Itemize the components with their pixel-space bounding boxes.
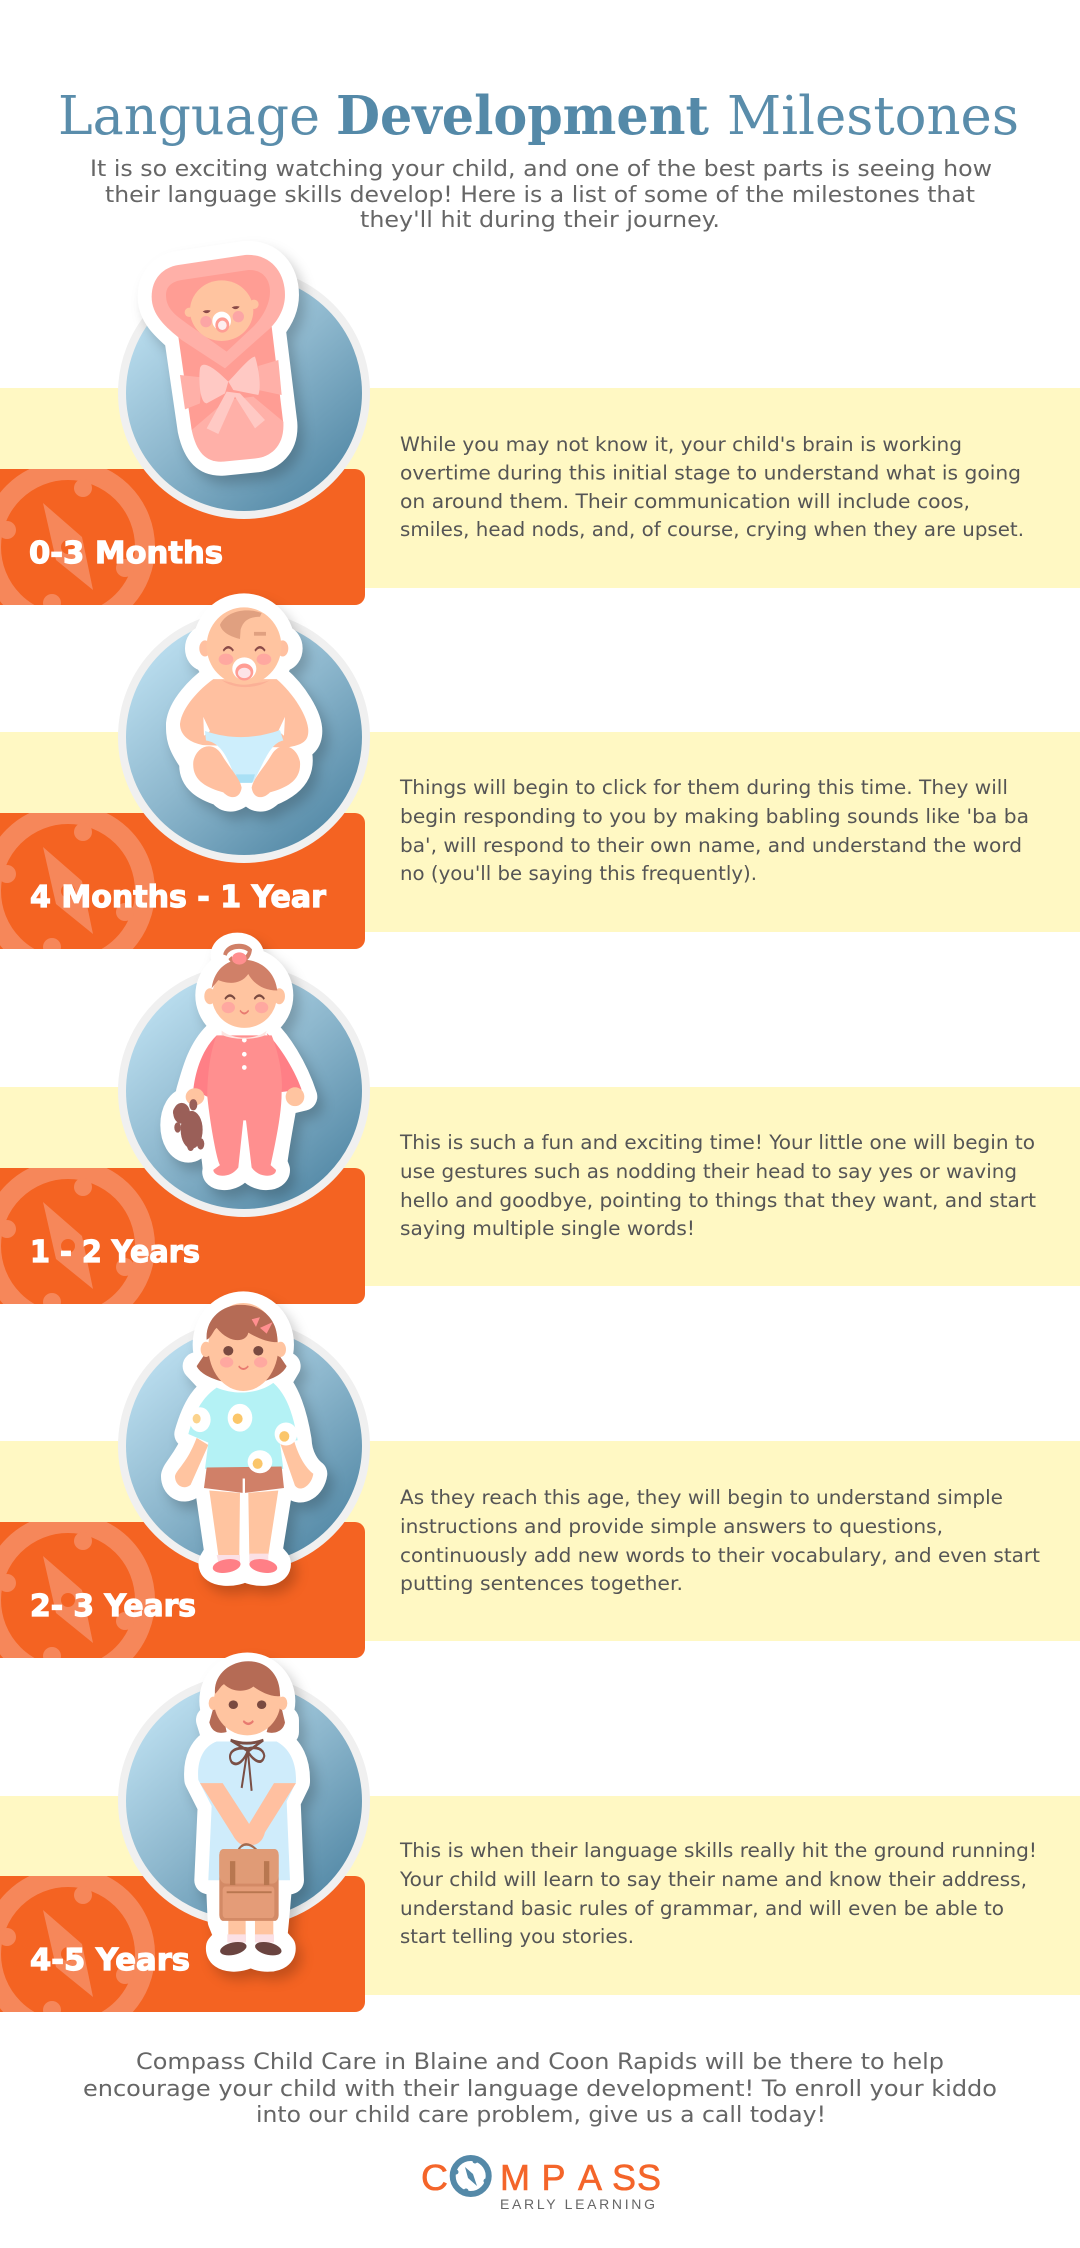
label: 2- 3 Years [30, 1589, 196, 1624]
circle [122, 1324, 366, 1568]
circle [122, 1679, 366, 1923]
panel: 1 - 2 years [0, 946, 1080, 1323]
label: 0-3 Months [29, 536, 223, 571]
logo: C [421, 2157, 448, 2198]
label: 4-5 Years [30, 1943, 190, 1978]
description: on around them. Their communication will include coos, [400, 490, 970, 513]
intro text: It is so exciting watching your child, and one of the best parts is seeing how [90, 157, 992, 182]
description: continuously add new words to their vocabulary, and even start [400, 1544, 1040, 1567]
description [399, 1131, 1036, 1240]
label: 4 Months - 1 Year [30, 880, 326, 915]
description: saying multiple single words! [400, 1217, 695, 1240]
icon: child with backpack [198, 1661, 296, 1958]
description: begin responding to you by making babling sounds like 'ba ba [400, 805, 1029, 828]
label: 1 - 2 Years [30, 1235, 200, 1270]
title: Language [58, 86, 320, 147]
description: While you may not know it, your child's brain is working [400, 433, 962, 456]
description: smiles, head nods, and, of course, crying when they are upset. [400, 518, 1024, 541]
description: use gestures such as nodding their head to say yes or waving [400, 1160, 1017, 1183]
icon: compass logo [453, 2158, 489, 2194]
description: putting sentences together. [400, 1572, 683, 1595]
orange label tab [0, 1876, 365, 2012]
panel: 0-3 months [0, 255, 1080, 624]
logo: MPASS [500, 2157, 661, 2198]
yellow band [0, 732, 1080, 932]
orange label tab [0, 469, 365, 605]
description: understand basic rules of grammar, and will even be able to [400, 1897, 1004, 1920]
intro text [90, 157, 992, 233]
icon: swaddled baby [152, 255, 285, 462]
orange label tab [0, 813, 365, 949]
icon: sitting baby [180, 607, 308, 798]
closing text [83, 2050, 997, 2128]
intro text: they'll hit during their journey. [360, 208, 720, 233]
orange label tab [0, 1522, 365, 1658]
title: Development [336, 85, 709, 147]
description [399, 776, 1029, 885]
description: Your child will learn to say their name and know their address, [399, 1868, 1027, 1891]
icon: child in egg shirt [175, 1303, 313, 1575]
yellow band [0, 1087, 1080, 1286]
yellow band [0, 388, 1080, 588]
description [400, 1486, 1040, 1595]
description: hello and goodbye, pointing to things that they want, and start [400, 1189, 1036, 1212]
description: As they reach this age, they will begin to understand simple [400, 1486, 1003, 1509]
panel: 4-5 years [0, 1661, 1080, 2031]
description: ba', will respond to their own name, and understand the word [400, 834, 1022, 857]
closing text: into our child care problem, give us a call today! [256, 2103, 826, 2128]
title [58, 85, 1019, 147]
description [399, 1839, 1037, 1948]
circle [122, 271, 366, 515]
panel: 4 months - 1 year [0, 607, 1080, 968]
closing text: Compass Child Care in Blaine and Coon Rapids will be there to help [136, 2050, 944, 2075]
description: start telling you stories. [400, 1925, 634, 1948]
circle [122, 615, 366, 859]
orange label tab [0, 1168, 365, 1304]
yellow band [0, 1441, 1080, 1641]
logo: EARLY LEARNING [500, 2196, 657, 2212]
description: This is such a fun and exciting time! Your little one will begin to [399, 1131, 1035, 1154]
icon: toddler with teddy bear [173, 946, 304, 1176]
circle [122, 969, 366, 1213]
yellow band [0, 1796, 1080, 1995]
closing text: encourage your child with their language development! To enroll your kiddo [83, 2077, 997, 2102]
description: Things will begin to click for them during this time. They will [399, 776, 1008, 799]
description: This is when their language skills really hit the ground running! [399, 1839, 1037, 1862]
description: instructions and provide simple answers to questions, [400, 1515, 943, 1538]
intro text: their language skills develop! Here is a list of some of the milestones that [105, 183, 975, 208]
description [400, 433, 1024, 541]
panel: 2 - 3 years [0, 1303, 1080, 1677]
logo [421, 2157, 661, 2212]
title: Milestones [727, 86, 1019, 147]
description: no (you'll be saying this frequently). [400, 862, 757, 885]
description: overtime during this initial stage to understand what is going [400, 462, 1021, 484]
